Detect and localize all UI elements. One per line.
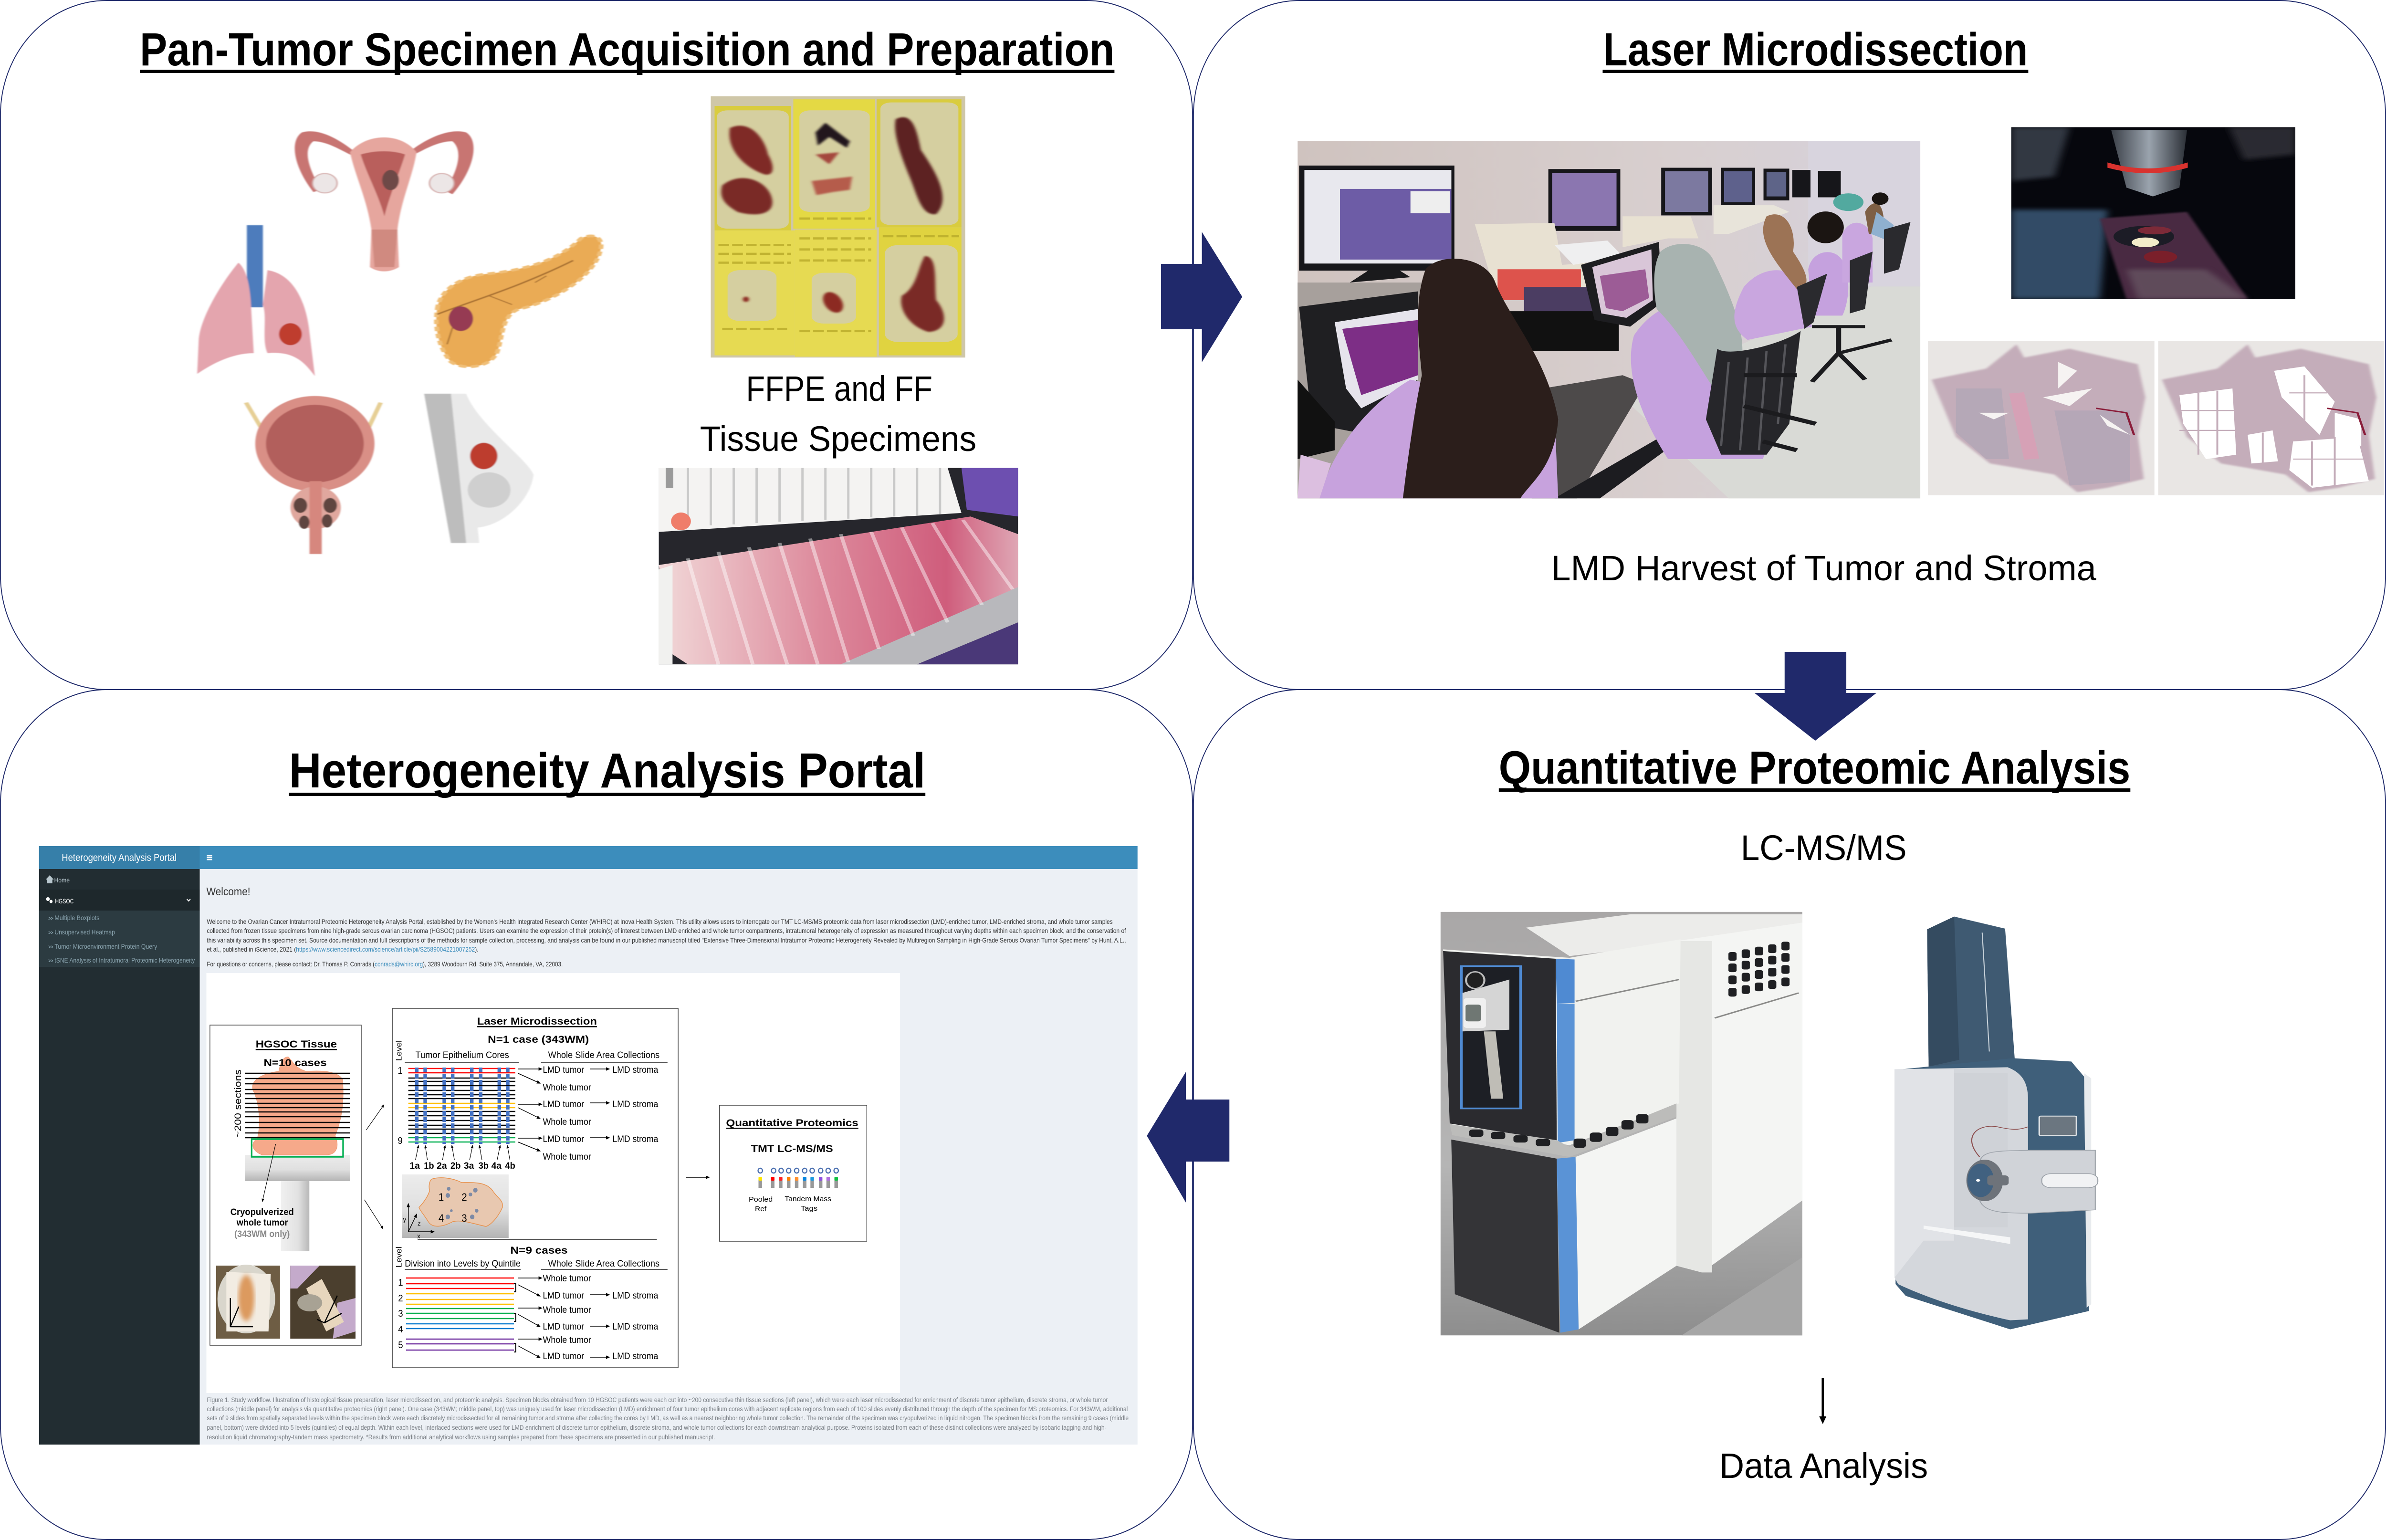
collections: N=1 case: LMD tumor: [543, 1099, 584, 1109]
portal sidebar menu: Tumor Microenvironment Protein Query: [54, 943, 157, 950]
panel: quantitative proteomic analysis: [1193, 690, 2386, 1540]
box: HGSOC tissue: Cryopulverized: [230, 1206, 294, 1217]
box: laser microdissection: Division into Levels by Quintile: [405, 1258, 521, 1268]
text: LC-MS/MS: LC-MS/MS: [1741, 828, 1907, 868]
photo: mass spectrometer: [1441, 912, 1802, 1335]
title: pan-tumor specimen: Pan-Tumor Specimen Acquisition and Preparation: [140, 23, 1114, 75]
text block: portal introduction: Welcome to the Ovarian Cancer Intratumoral Proteomic Heterogeneity Analysis Portal, established by the Women's Health Integrated Research Center (WHIRC) at Inova Health System. This utility allows users to interrogate our TMT LC-MS/MS proteomic data from laser microdissection (LMD)-enriched tumor, LMD-enriched stroma, and whole tumor samples: [207, 918, 1113, 925]
text block: figure caption: collections (middle panel) for analysis via quantitative proteomics (right panel). One case (343WM; middle panel, top) was uniquely used for laser microdissection (LMD) enrichment of four tumor epithelium cores with adjacent replicate regions from each of 100 slides evenly distributed through the depth of the specimen for MS proteomics. For 343WM, additional: [207, 1405, 1128, 1413]
collections: N=9 cases: LMD stroma: [612, 1351, 659, 1361]
chart: quintile levels: [398, 1278, 516, 1352]
photo: slide box: [659, 468, 1018, 664]
diagram: core positions in section: z: [418, 1220, 421, 1227]
text block: portal introduction: [207, 918, 1126, 968]
box: laser microdissection: N=1 case (343WM): [488, 1034, 589, 1045]
collections: N=1 case: LMD stroma: [612, 1064, 659, 1075]
box: quantitative proteomics: [720, 1105, 867, 1241]
box: HGSOC tissue: (343WM only): [234, 1228, 290, 1239]
photo: tissue cassettes: [711, 96, 965, 357]
icon: bladder and prostate: [246, 396, 381, 554]
portal sidebar menu: Multiple Boxplots: [54, 914, 100, 922]
portal sidebar menu: [39, 869, 200, 1445]
collections: N=1 case: Whole tumor: [543, 1082, 591, 1092]
box: HGSOC tissue: whole tumor: [236, 1217, 288, 1227]
chart: quintile levels: 4: [398, 1324, 403, 1335]
box: laser microdissection: 1: [398, 1066, 403, 1076]
arrow: to data analysis: [1819, 1378, 1826, 1424]
box: quantitative proteomics: Tandem Mass: [785, 1195, 831, 1203]
collections: N=9 cases: LMD stroma: [612, 1290, 659, 1300]
diagram: core positions in section: [402, 1174, 509, 1240]
study workflow figure: [206, 973, 900, 1393]
arrow: proteomics to portal: [1147, 1072, 1229, 1203]
photo: microscope objective: [2011, 127, 2295, 299]
collections: N=1 case: Whole tumor: [543, 1151, 591, 1162]
arrows: to laser microdissection box: [365, 1105, 384, 1229]
core labels: 4b: [505, 1160, 515, 1171]
collections: N=9 cases: LMD stroma: [612, 1321, 659, 1331]
diagram: core positions in section: 4: [439, 1212, 444, 1224]
chart: quintile levels: 3: [398, 1309, 403, 1319]
collections: N=9 cases: LMD tumor: [543, 1290, 584, 1300]
text block: portal introduction: collected from frozen tissue specimens from nine high-grade serous ovarian carcinoma (HGSOC) patients. Users can examine the expression of their protein(s) of interest between LMD enriched and whole tumor compartments, intratumoral heterogeneity of expression as measured throughout varying depths within each specimen block, and the conservation of: [207, 927, 1126, 934]
collections: N=9 cases: Whole tumor: [543, 1304, 591, 1315]
text: FFPE and FF tissue specimens: FFPE and FF: [746, 369, 932, 409]
core labels: 1a: [409, 1160, 420, 1171]
text block: figure caption: panel, bottom) were divided into 5 levels (quintiles) of equal depth. Within each level, interlaced sections were used for LMD enrichment of discrete tumor epithelium, discrete stroma, and whole tumor collections for each downstream analytical purpose. Proteins isolated from each of these distinct collections were analyzed by isobaric tagging and high-: [207, 1424, 1107, 1431]
text block: portal introduction: For questions or concerns, please contact: Dr. Thomas P. Conrads (conrads@whirc.org), 3289 Woodburn Rd, Suite 375, Annandale, VA, 22003.: [207, 961, 563, 968]
box: laser microdissection: Laser Microdissection: [477, 1016, 597, 1027]
text block: portal introduction: this variability across this specimen set. Source documentation and full descriptions of the methods for sample collection, processing, and analysis can be found in our published manuscript titled "Extensive Three-Dimensional Intratumor Proteomic Heterogeneity Revealed by Multiregion Sampling in High-Grade Serous Ovarian Tumor Specimens" by Hunt, A.L.,: [207, 937, 1126, 944]
box: laser microdissection: Whole Slide Area Collections: [548, 1258, 659, 1268]
core labels: 3b: [479, 1160, 489, 1171]
box: HGSOC tissue: HGSOC Tissue: [256, 1039, 337, 1050]
portal header bar: Heterogeneity Analysis Portal: [62, 852, 177, 863]
organ illustrations: [197, 131, 601, 554]
text block: figure caption: sets of 9 slides from spatially separated levels within the specimen block were each discretely microdissected for all remaining tumor and stroma after collecting the cores by LMD, as well as a nearest neighboring whole tumor collection. The remainder of the specimen was cryopulverized in liquid nitrogen. The specimen blocks from the remaining 9 cases (middle: [207, 1414, 1129, 1422]
panel: laser microdissection: [1193, 0, 2386, 690]
box: laser microdissection: [392, 1008, 678, 1368]
collections: N=9 cases: LMD tumor: [543, 1351, 584, 1361]
box: laser microdissection: Tumor Epithelium Cores: [416, 1049, 509, 1060]
text block: portal introduction: et al., published in iScience, 2021 (https://www.sciencedirect.com/science/article/pii/S2589004221007252).: [207, 946, 479, 953]
box: quantitative proteomics: Quantitative Proteomics: [726, 1118, 858, 1129]
title: laser microdissection: Laser Microdissection: [1603, 23, 2028, 75]
chart: quintile levels: 5: [398, 1340, 403, 1351]
icon: uterus and ovaries: [295, 131, 473, 272]
portal sidebar menu: Home: [54, 877, 70, 884]
box: laser microdissection: Level: [394, 1040, 404, 1061]
collections: N=1 case: LMD stroma: [612, 1099, 659, 1109]
box: quantitative proteomics: Pooled: [749, 1196, 773, 1204]
photo: LMD laboratory: [1297, 141, 1920, 498]
box: quantitative proteomics: Ref: [755, 1205, 767, 1213]
photo: H&E section before and after LMD: [1928, 341, 2384, 495]
title: quantitative proteomic analysis: Quantitative Proteomic Analysis: [1499, 742, 2130, 794]
collections: N=1 case: [518, 1064, 659, 1162]
core labels: 2b: [450, 1160, 460, 1171]
icon: tandem mass tag tubes: [758, 1168, 838, 1188]
box: HGSOC tissue: ~200 sections: [233, 1069, 243, 1138]
box: laser microdissection: 9: [398, 1136, 403, 1146]
icon: breast: [424, 394, 534, 543]
core labels: 2a: [437, 1160, 447, 1171]
collections: N=1 case: LMD tumor: [543, 1133, 584, 1144]
diagram: core positions in section: 3: [461, 1212, 467, 1224]
diagram: core positions in section: 1: [439, 1191, 444, 1203]
core labels: 1b: [424, 1160, 434, 1171]
core labels: 4a: [492, 1160, 502, 1171]
panel: heterogeneity analysis portal: [0, 690, 1193, 1540]
core labels: [409, 1145, 515, 1171]
text: FFPE and FF tissue specimens: Tissue Specimens: [700, 419, 976, 459]
arrow: laser microdissection to proteomics: [1755, 652, 1876, 741]
icon: mass spectrometer illustration: [1894, 917, 2098, 1330]
portal sidebar menu: »: [48, 957, 54, 964]
text block: figure caption: resolution liquid chromatography-tandem mass spectrometry. *Results from additional analytical workflows using samples prepared from these specimens are presented in our published manuscript.: [207, 1434, 715, 1441]
portal header bar: [39, 846, 1138, 869]
text: data analysis: Data Analysis: [1719, 1446, 1928, 1486]
chart: tumor epithelium core grid: [408, 1068, 515, 1144]
portal sidebar menu: HGSOC: [55, 898, 74, 905]
portal screenshot: [39, 846, 1138, 1445]
arrow: to quantitative proteomics box: [686, 1177, 709, 1178]
box: laser microdissection: Whole Slide Area Collections: [548, 1049, 659, 1060]
photo: frozen block side: [290, 1266, 356, 1339]
collections: N=9 cases: Whole tumor: [543, 1334, 591, 1345]
diagram: core positions in section: x: [417, 1233, 420, 1240]
panel: pan-tumor specimen acquisition and preparation: [0, 0, 1193, 690]
diagram: core positions in section: y: [403, 1216, 406, 1223]
box: HGSOC tissue: [210, 1025, 361, 1345]
portal sidebar menu: Unsupervised Heatmap: [54, 929, 115, 936]
title: heterogeneity analysis portal: Heterogeneity Analysis Portal: [289, 744, 925, 798]
text block: figure caption: [207, 1396, 1129, 1441]
box: laser microdissection: N=9 cases: [511, 1245, 568, 1256]
collections: N=1 case: LMD stroma: [612, 1133, 659, 1144]
icon: lungs: [197, 225, 315, 376]
portal sidebar menu: tSNE Analysis of Intratumoral Proteomic Heterogeneity: [54, 957, 195, 964]
photo: frozen block top: [216, 1265, 280, 1339]
text block: figure caption: Figure 1. Study workflow. Illustration of histological tissue preparation, laser microdissection, and proteomic analysis. Specimen blocks obtained from 10 HGSOC patients were each cut into ~200 consecutive thin tissue sections (left panel), which were each laser microdissected for enrichment of discrete tumor epithelium, discrete stroma, or whole tumor: [207, 1396, 1108, 1404]
text: LMD harvest: LMD Harvest of Tumor and Stroma: [1551, 549, 2096, 588]
portal sidebar menu: »: [48, 914, 54, 922]
collections: N=1 case: Whole tumor: [543, 1116, 591, 1127]
box: quantitative proteomics: TMT LC-MS/MS: [751, 1143, 833, 1154]
core labels: 3a: [464, 1160, 474, 1171]
chart: quintile levels: 1: [398, 1278, 403, 1288]
collections: N=9 cases: Whole tumor: [543, 1273, 591, 1283]
diagram: core positions in section: 2: [461, 1191, 467, 1203]
arrow: specimen to laser microdissection: [1161, 232, 1242, 362]
portal sidebar menu: »: [48, 943, 54, 950]
portal sidebar menu: »: [48, 929, 54, 936]
collections: N=9 cases: LMD tumor: [543, 1321, 584, 1331]
box: quantitative proteomics: Tags: [801, 1205, 817, 1213]
box: laser microdissection: Level: [394, 1247, 404, 1268]
collections: N=9 cases: [518, 1273, 659, 1361]
icon: pancreas: [436, 236, 601, 367]
box: HGSOC tissue: N=10 cases: [263, 1058, 327, 1069]
chart: quintile levels: 2: [398, 1293, 403, 1304]
text: FFPE and FF tissue specimens: [700, 369, 976, 459]
collections: N=1 case: LMD tumor: [543, 1064, 584, 1075]
heading: welcome: Welcome!: [206, 885, 251, 898]
